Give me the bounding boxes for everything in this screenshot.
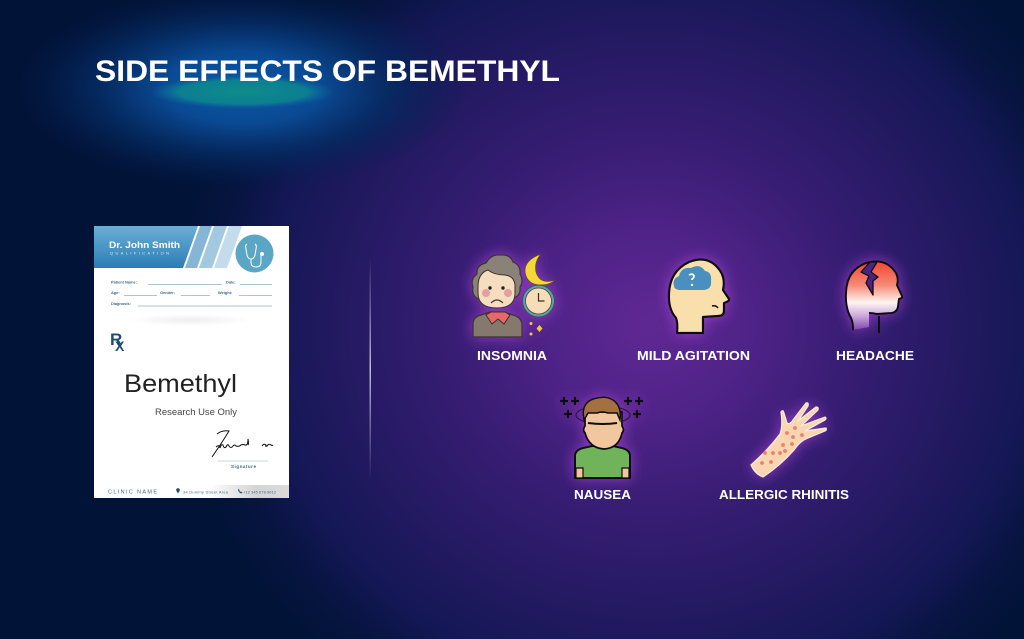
patient form fields: Age: [111, 290, 120, 295]
icon: stethoscope [236, 234, 274, 272]
patient form fields: Date: [226, 280, 236, 284]
patient form fields: Patient Name: [111, 280, 137, 284]
moon [525, 254, 555, 285]
research use only: Research Use Only [155, 407, 237, 418]
signature [212, 431, 273, 469]
label: insomnia: INSOMNIA [477, 349, 547, 363]
patient form fields [111, 280, 272, 306]
panel: prescription card [94, 226, 289, 498]
label: headache: HEADACHE [836, 349, 914, 363]
label: nausea: NAUSEA [574, 488, 631, 502]
sparkles [530, 322, 542, 336]
face and hair [584, 412, 624, 449]
icon: insomnia [472, 254, 555, 337]
doctor name: Dr. John Smith [109, 240, 180, 250]
label: allergic rhinitis: ALLERGIC RHINITIS [719, 488, 849, 502]
qualification: QUALIFICATION [110, 250, 169, 256]
drug name: Bemethyl [124, 370, 237, 398]
title: SIDE EFFECTS OF BEMETHYL [95, 55, 560, 88]
patient form fields: Diagnosis: [111, 301, 131, 306]
divider [370, 258, 371, 480]
face [478, 270, 515, 308]
hair [472, 255, 522, 300]
label: mild agitation: MILD AGITATION [637, 349, 750, 363]
dizzy stars [560, 397, 643, 418]
card footer: +12 345 678 9012 [243, 490, 276, 494]
icon: headache [846, 261, 902, 333]
rx symbol [110, 330, 125, 354]
patient form fields: Gender: [160, 290, 175, 295]
patient form fields: Weight: [218, 290, 232, 295]
rx symbol: R [110, 330, 122, 349]
icon: mild agitation [669, 260, 729, 333]
card footer [108, 485, 289, 498]
icon: allergic rhinitis [751, 403, 826, 477]
rx symbol: X [115, 338, 125, 354]
card header band [94, 226, 242, 268]
clock [522, 285, 554, 317]
signature: Signature [231, 464, 256, 469]
icon: nausea [560, 397, 643, 478]
card footer: 34 Dummy Street Area [183, 490, 229, 494]
body [575, 446, 630, 478]
card footer: CLINIC NAME [108, 490, 157, 496]
body [473, 312, 522, 337]
